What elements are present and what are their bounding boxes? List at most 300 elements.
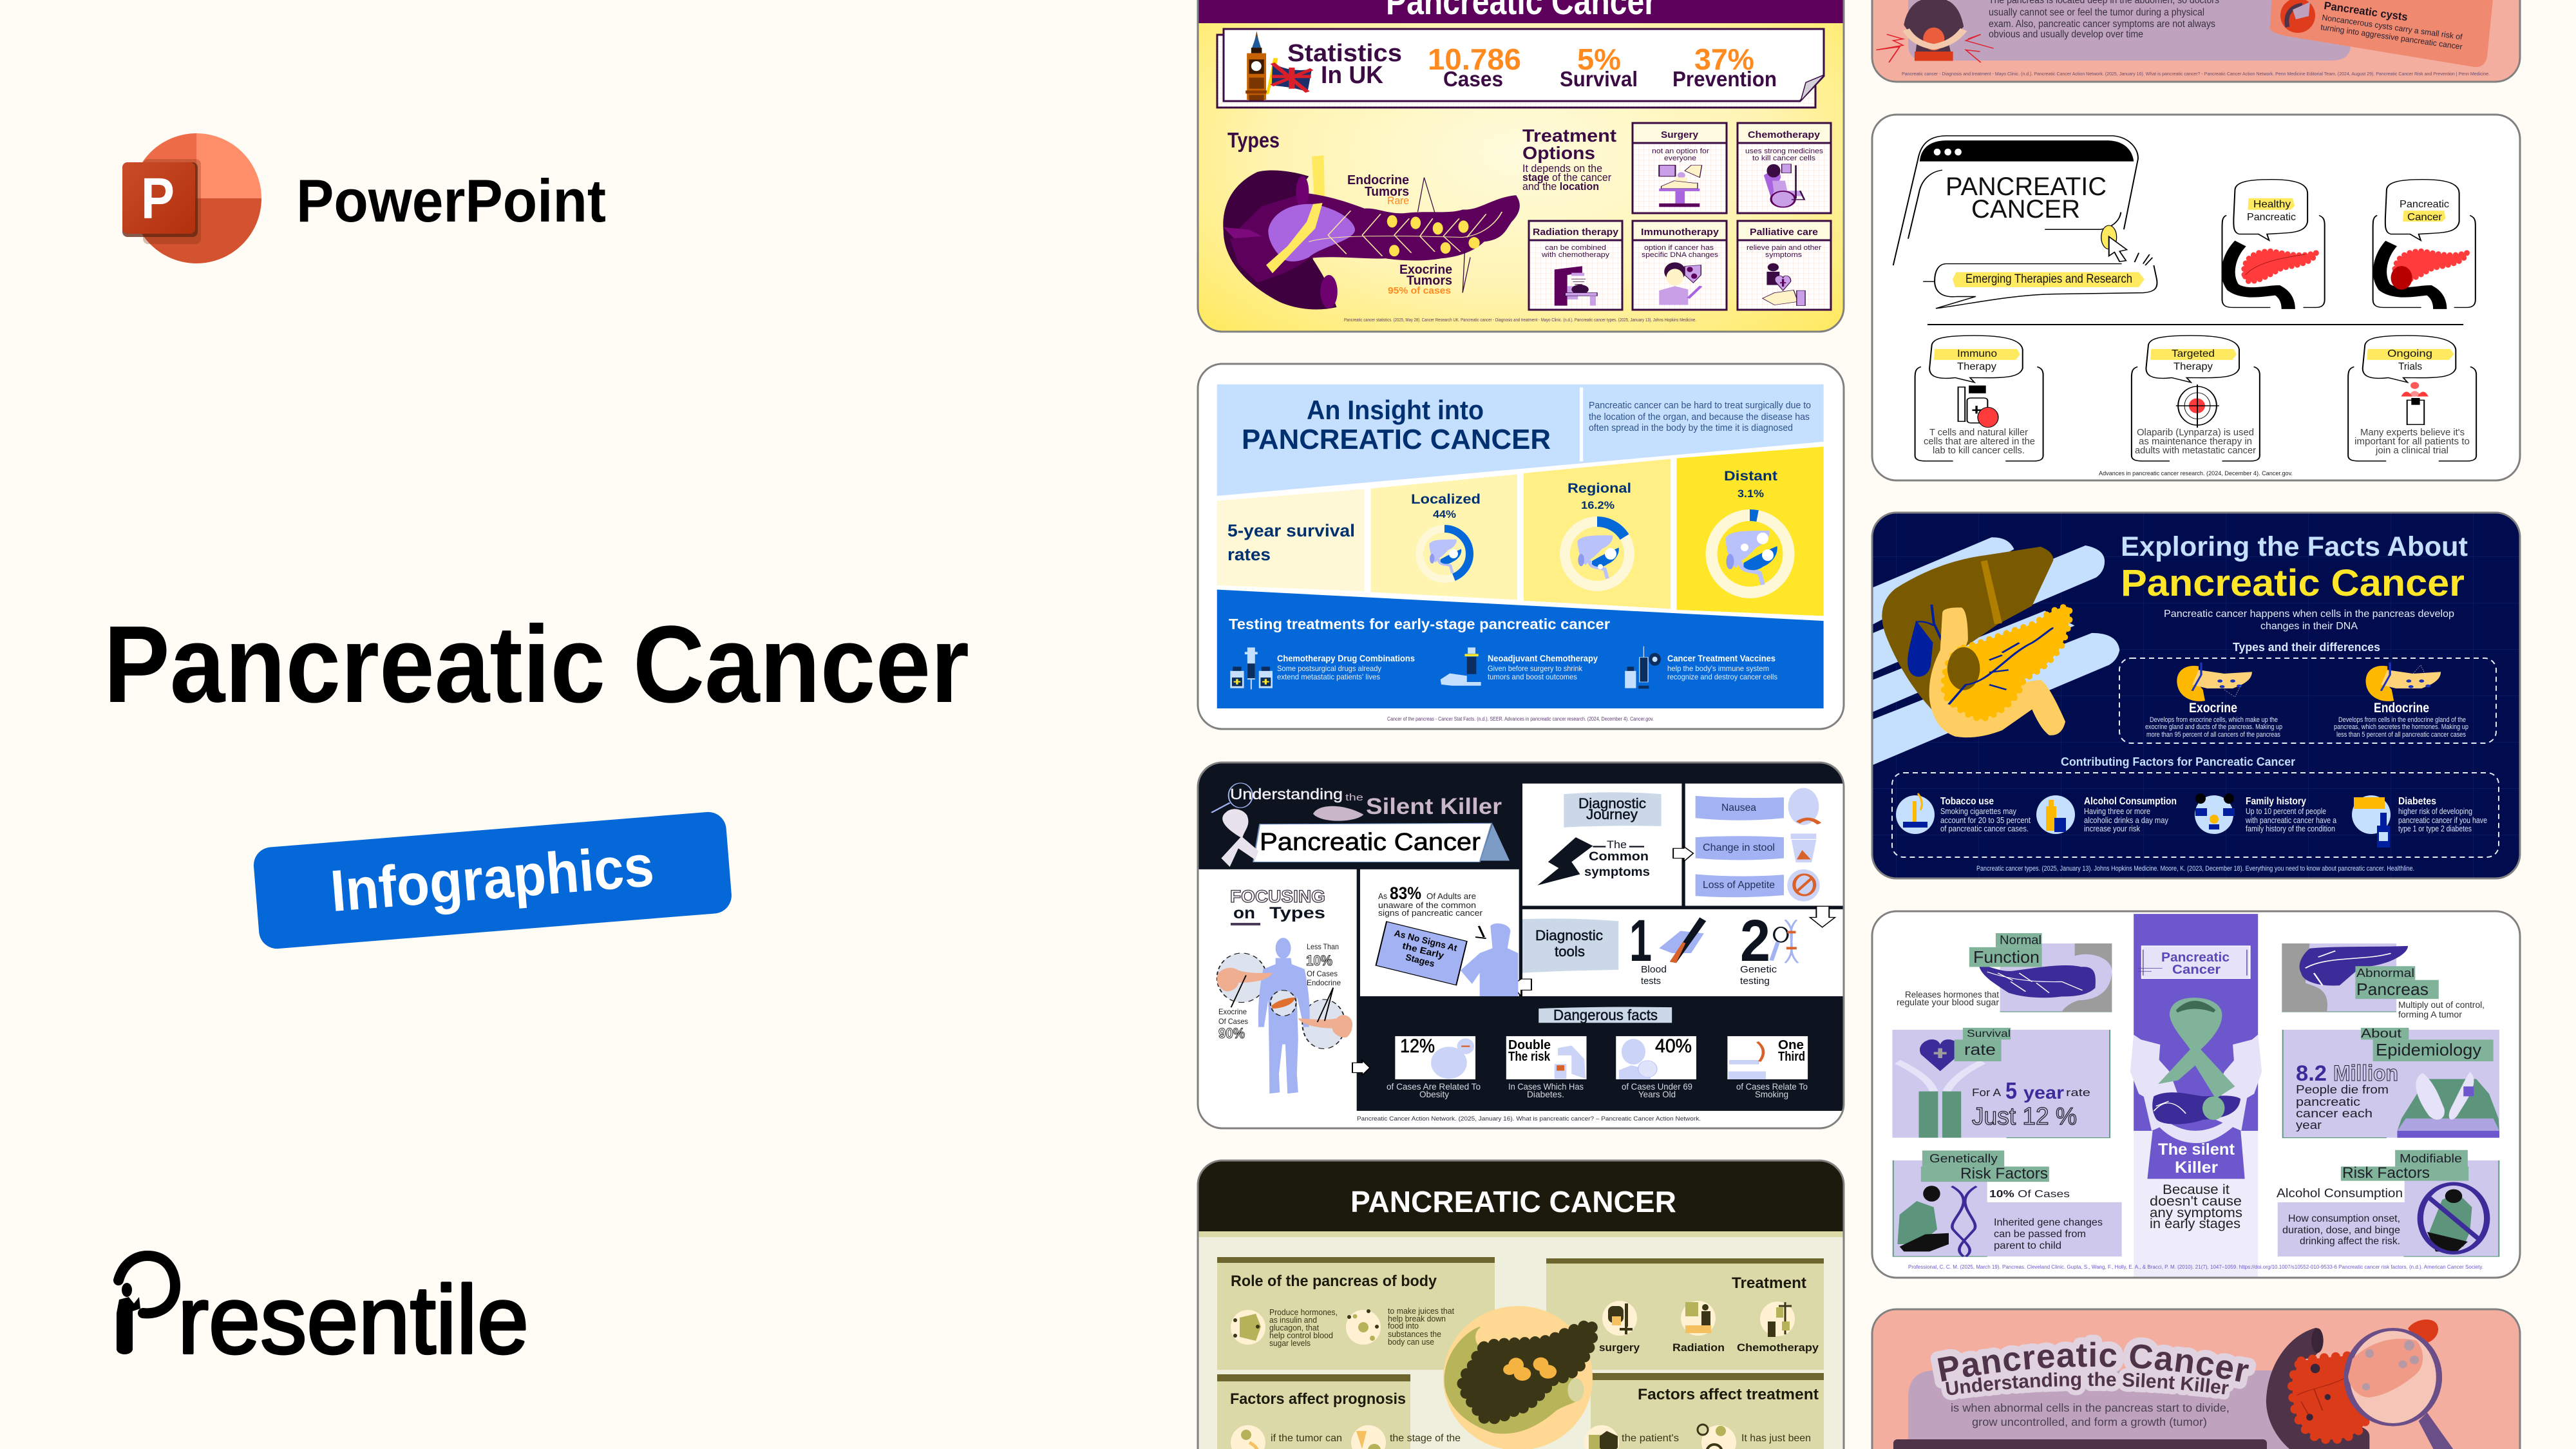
treatment: Chemotherapy Drug Combinations (1230, 647, 1415, 689)
tool: genetic testing: 2 (1740, 908, 1770, 974)
box: Treatment: Chemotherapy (1737, 1341, 1819, 1354)
card: Surgery (1633, 123, 1727, 213)
block: Genetically risk factors: Inherited gene changes (1994, 1217, 2103, 1228)
symptom: Nausea: Nausea (1721, 802, 1756, 813)
label: Normal function: regulate your blood sugar (1897, 998, 2000, 1007)
badge: Infographics (252, 811, 733, 950)
arrow: down (1810, 906, 1835, 927)
description: join a clinical trial (2375, 446, 2448, 456)
callout: Pancreatic cysts: Pancreatic cysts (2323, 0, 2409, 23)
survival icon (1920, 1039, 1960, 1071)
description: T cells and natural killer (1929, 428, 2028, 438)
badge: Infographics: Infographics (328, 833, 656, 924)
label: Endocrine 10%: Endocrine (1307, 978, 1341, 987)
panel background (1872, 513, 2520, 878)
text: stage (1390, 1433, 1461, 1449)
card: Chemotherapy (1738, 123, 1831, 213)
label: Endocrine tumors: Tumors (1365, 185, 1409, 199)
card: Radiation therapy: Radiation therapy (1533, 227, 1619, 238)
block: Epidemiology: People die from (2296, 1083, 2389, 1096)
arrow: right to facts (1352, 1060, 1370, 1075)
treatment: Cancer Treatment Vaccines (1625, 646, 1777, 688)
heading: 5-year survival rates: rates (1227, 545, 1271, 564)
panel: The silent killer (purple) (1872, 911, 2520, 1279)
icon: Big Ben and UK flag (1245, 31, 1312, 100)
header band (1198, 0, 1844, 23)
title: PANCREATIC (1946, 173, 2107, 201)
box: Factors affect treatment (1584, 1373, 1824, 1449)
column text: The silent killer: The silent (2158, 1141, 2235, 1159)
panel: Understanding the Silent Killer (1198, 762, 1848, 1128)
stage: Regional 16.2%: 16.2% (1581, 499, 1615, 511)
heading: Treatment options (1522, 126, 1616, 193)
card: Healthy pancreas (2222, 180, 2325, 309)
column text: The silent killer: Because it (2163, 1182, 2230, 1197)
text: hormones: help control blood (1269, 1331, 1333, 1340)
factor: Tobacco use: of pancreatic cancer cases. (1940, 824, 2029, 833)
label: Endocrine 10%: Of Cases (1307, 969, 1338, 978)
fact: smoking: One (1778, 1038, 1804, 1052)
icon: clock (1698, 1425, 1736, 1449)
section: Diagnostic tools: Diagnostic (1535, 927, 1603, 943)
symptom: Nausea (1721, 788, 1819, 825)
fact: smoking: Smoking (1755, 1089, 1788, 1099)
type: Exocrine (2145, 663, 2282, 739)
sign text: As No Signs At (1393, 927, 1459, 953)
factor: Diabetes (2352, 795, 2487, 848)
callout: 83% unaware (1376, 884, 1518, 996)
intro: Pancreatic cancer happens when cells in the pancreas develop (2164, 609, 2454, 620)
stat: prevention (1674, 49, 1776, 86)
factor: Tobacco use: Tobacco use (1940, 796, 1994, 807)
card: Immunotherapy (1633, 221, 1727, 310)
illustration: body with pancreas (1217, 938, 1352, 1094)
icon: surgeon (1231, 1425, 1265, 1449)
stage: Regional 16.2%: Regional (1567, 481, 1631, 496)
description: Olaparib (Lynparza) is used (2137, 428, 2254, 438)
section: Diagnostic tools (1535, 908, 1798, 987)
dashed frame: types (2119, 658, 2496, 743)
source citation: Pancreatic Cancer Action Network. (2025, January 16). What is pancreatic cancer? – Pancreatic Cancer Action Network. (1357, 1115, 1701, 1122)
sign text: the Early (1401, 940, 1445, 961)
source citation: Cancer of the pancreas - Cancer Stat Facts. (n.d.). SEER. Advances in pancreatic cancer research. (2024, December 4). Cancer.gov. (1387, 716, 1654, 722)
illustration: organs and stripes (1873, 537, 2119, 765)
panel: Pancreatic cancer olive (1198, 1160, 1844, 1449)
description: Develops from exocrine cells, which make up the (2150, 716, 2278, 724)
panel background (1198, 762, 1844, 1128)
fact: under 69: of Cases Under 69 (1622, 1081, 1692, 1092)
fact: obesity: of Cases Are Related To (1387, 1081, 1481, 1092)
block: Survival rate: rate (1964, 1041, 1996, 1059)
box: Factors affect prognosis: Factors affect prognosis (1230, 1390, 1406, 1408)
Presentile wordmark: resentile (178, 1265, 529, 1374)
label: Endocrine tumors: Rare (1387, 194, 1409, 207)
label: Exocrine tumors: Exocrine (1399, 263, 1452, 277)
icon: hormones (1231, 1310, 1265, 1345)
label: Endocrine tumors (1348, 175, 1409, 204)
panel border (1872, 115, 2520, 480)
column title: Pancreatic Cancer: Pancreatic (2161, 951, 2230, 965)
block: Epidemiology: Epidemiology (2376, 1040, 2481, 1059)
heading: The common symptoms: Common (1589, 850, 1649, 864)
factor: Alcohol Consumption: alcoholic drinks a day may (2084, 816, 2169, 825)
alcohol prohibition icon (2429, 1193, 2472, 1247)
source citation: Pancreatic cancer - Diagnosis and treatment - Mayo Clinic. (n.d.). Pancreatic Cancer Action Network. (2025, January 16). What is pancreatic cancer? - Pancreatic Cancer Action Network. Penn Medicine Editorial Team. (2024, August 29). Pancreatic Cancer Risk and Prevention | Penn Medicine. (1902, 71, 2490, 77)
column title: Pancreatic Cancer: Cancer (2172, 963, 2221, 977)
treatment: Neoadjuvant Chemotherapy (1441, 647, 1598, 686)
stage: Distant 3.1%: Distant (1724, 469, 1777, 484)
definition text (1951, 1401, 2230, 1428)
paragraph: usually cannot see or feel the tumor during a physical (1989, 7, 2204, 18)
label: Normal function (1897, 934, 2041, 1007)
card: Chemotherapy: Chemotherapy (1748, 129, 1821, 140)
panel background (1872, 1309, 2520, 1449)
title: Understanding the Silent Killer: Silent Killer (1366, 794, 1502, 819)
icon: vaccine (1625, 646, 1661, 688)
arrow: left to awareness (1511, 979, 1531, 996)
factor: Diabetes: higher risk of developing (2398, 807, 2472, 816)
block: Survival rate (1964, 1028, 2090, 1130)
icon: stage (1351, 1425, 1386, 1449)
panel title: PANCREATIC CANCER (1350, 1185, 1676, 1218)
icon: stool cup (1791, 833, 1816, 862)
block: Modifiable risk factors: duration, dose, and binge (2282, 1225, 2400, 1236)
label: Exocrine tumors: 95% of cases (1388, 285, 1451, 296)
symptom: Change in stool (1703, 833, 1816, 862)
block: Genetically risk factors: can be passed from (1994, 1229, 2086, 1240)
callout: 83% unaware: As (1378, 891, 1387, 901)
label: Normal function: Releases hormones that (1905, 990, 1999, 999)
block: Epidemiology (2296, 1027, 2481, 1132)
card: Radiation therapy: can be combined (1545, 244, 1606, 252)
box: Treatment: surgery (1599, 1341, 1640, 1354)
panel background (1872, 0, 2520, 82)
column text: The silent killer: any symptoms (2150, 1206, 2242, 1220)
label: Normal function: Function (1973, 947, 2040, 967)
text: hormones: Produce hormones, (1269, 1307, 1338, 1317)
treatment: Neoadjuvant Chemotherapy: Given before surgery to shrink (1488, 664, 1583, 673)
block: Survival rate: 5 (2005, 1077, 2017, 1104)
column text: The silent killer: in early stages (2150, 1217, 2240, 1231)
text: juices: body can use (1388, 1337, 1434, 1347)
column text: The silent killer: Killer (2175, 1159, 2218, 1177)
heading: 5-year survival rates: 5-year survival (1227, 521, 1355, 540)
box: Factors affect treatment: Factors affect treatment (1638, 1386, 1819, 1403)
stat: prevention: Prevention (1672, 67, 1777, 91)
factor: Tobacco use: account for 20 to 35 percent (1940, 816, 2031, 825)
card: Pancreatic cancer: Cancer (2407, 212, 2443, 223)
banner: Pancreatic Cancer with ribbon (1221, 809, 1510, 867)
description: as maintenance therapy in (2139, 437, 2252, 447)
title (2121, 531, 2468, 604)
label: Exocrine 90%: 90% (1218, 1025, 1245, 1041)
icon: syringe and hand (1441, 647, 1481, 686)
icon: sick face (1788, 788, 1819, 825)
label: Endocrine 10%: Less Than (1307, 942, 1339, 951)
icon: PowerPoint circle (122, 133, 261, 263)
icon: Presentile P with person (117, 1256, 175, 1354)
label: Exocrine 90%: Of Cases (1218, 1017, 1248, 1026)
pancreas right (2282, 943, 2327, 1012)
stage: Distant 3.1%: 3.1% (1738, 488, 1764, 500)
card: Immuno therapy (1915, 336, 2043, 461)
text: hormones (1269, 1307, 1338, 1348)
title: Understanding the Silent Killer: Understanding (1230, 786, 1343, 802)
section: Diagnostic tools: tools (1555, 943, 1585, 960)
card: Ongoing trials: Trials (2398, 361, 2422, 372)
type: Exocrine: Exocrine (2189, 701, 2237, 715)
factor: Family history: Family history (2246, 796, 2306, 807)
fact: smoking: of Cases Relate To (1736, 1081, 1808, 1092)
heading: types: Types and their differences (2233, 641, 2380, 654)
text: stage: the stage of the (1390, 1433, 1461, 1444)
source citation: Pancreatic cancer types. (2025, January 13). Johns Hopkins Medicine. Moore, K. (2023, December 18). Everything you need to know about pancreatic cancer. Healthline. (1976, 865, 2414, 873)
treatment: Chemotherapy Drug Combinations: Chemotherapy Drug Combinations (1277, 653, 1415, 663)
block: Epidemiology: About (2361, 1027, 2402, 1041)
title: PANCREATIC CANCER (1242, 424, 1551, 455)
block: Genetically risk factors: parent to child (1994, 1240, 2061, 1251)
box: Treatment: Treatment (1732, 1274, 1806, 1292)
description: adults with metastatic cancer (2135, 446, 2256, 456)
fact: obesity: 12% (1400, 1036, 1435, 1057)
symptom: Loss of Appetite: Loss of Appetite (1703, 880, 1775, 891)
label: Endocrine tumors: Endocrine (1347, 173, 1409, 187)
text: juices: to make juices that (1388, 1306, 1454, 1316)
heading: Treatment options: stage of the cancer (1522, 171, 1611, 184)
description: Develops from cells in the endocrine gland of the (2338, 716, 2466, 724)
panel border (1872, 1309, 2520, 1449)
paragraph: obvious and usually develop over time (1989, 29, 2143, 40)
treatment: Cancer Treatment Vaccines: recognize and destroy cancer cells (1667, 672, 1777, 681)
block: Modifiable risk factors: Modifiable (2400, 1151, 2462, 1165)
heading: contributing factors: Contributing Factors for Pancreatic Cancer (2061, 755, 2295, 768)
main title: Pancreatic Cancer (104, 603, 969, 726)
paragraph (1989, 0, 2219, 40)
title: An Insight into (1307, 395, 1484, 425)
label: Endocrine 10% (1306, 942, 1341, 987)
donut chart: 16.2% (1565, 522, 1629, 586)
panel background (1198, 1160, 1844, 1449)
card: Radiation therapy (1529, 221, 1622, 310)
block: Survival rate: year (2023, 1083, 2064, 1103)
icon: patient and shield (1659, 262, 1701, 305)
stat: cases (1430, 49, 1520, 86)
block: Epidemiology: cancer each (2296, 1107, 2372, 1120)
fact: under 69: 40% (1655, 1036, 1692, 1057)
column text: The silent killer (2150, 1141, 2242, 1231)
stat: prevention: 37% (1694, 43, 1754, 76)
icon: test tube in hand (1659, 917, 1706, 963)
header strip (1198, 1231, 1844, 1237)
factor: Alcohol Consumption (2036, 795, 2177, 834)
block: Modifiable risk factors: How consumption onset, (2288, 1213, 2400, 1224)
label: Exocrine tumors (1388, 264, 1452, 294)
description: less than 5 percent of all pancreatic cancer cases (2336, 731, 2466, 739)
shapes (1892, 914, 2499, 1279)
block: Epidemiology: year (2296, 1119, 2322, 1132)
stat: cases: Cases (1443, 67, 1503, 91)
column title: Pancreatic Cancer (2161, 951, 2230, 977)
description (1924, 428, 2035, 456)
label: Abnormal pancreas: Multiply out of control, (2398, 1000, 2485, 1010)
box: Diagnostic journey: Journey (1586, 806, 1638, 822)
block: Epidemiology: 8.2 (2296, 1061, 2327, 1086)
section: Focusing on types (1217, 887, 1352, 1094)
card: Surgery: everyone (1664, 155, 1696, 162)
intro paragraph (1589, 401, 1811, 433)
tool: blood tests (1629, 908, 1706, 987)
panel: Exploring the facts (navy) (1872, 513, 2520, 878)
block: Modifiable risk factors: Risk Factors (2342, 1164, 2430, 1182)
card: Ongoing trials (2348, 336, 2476, 461)
card: Palliative care: relieve pain and other (1747, 244, 1821, 252)
symptom: Loss of Appetite (1703, 869, 1820, 902)
panel background (1872, 115, 2520, 480)
type: Endocrine (2334, 663, 2468, 739)
card: Targeted therapy: Targeted (2172, 348, 2215, 359)
green strokes (1893, 1012, 2499, 1256)
tool: genetic testing: testing (1740, 976, 1770, 987)
heading: Treatment options: It depends on the (1522, 162, 1602, 175)
text: juices: substances the (1388, 1329, 1441, 1339)
text: tumor removal: if the tumor can (1271, 1433, 1342, 1444)
description: exocrine gland and ducts of the pancreas. Making up (2145, 723, 2282, 731)
card: Immuno therapy: Therapy (1957, 361, 1996, 372)
factor: Diabetes: type 1 or type 2 diabetes (2398, 824, 2472, 833)
factor: Family history: family history of the condition (2246, 824, 2335, 833)
card: Palliative care: Palliative care (1750, 227, 1818, 238)
label: Exocrine 90% (1218, 1007, 1248, 1041)
card: Chemotherapy: to kill cancer cells (1752, 155, 1816, 162)
description: cells that are altered in the (1924, 437, 2035, 447)
heading: Types: Types (1227, 128, 1280, 152)
heading: Treatment options: and the location (1522, 180, 1599, 193)
factor: Alcohol Consumption: Alcohol Consumption (2084, 796, 2177, 807)
box: Role of the pancreas (1217, 1257, 1495, 1370)
text: hormones: glucagon, that (1269, 1323, 1319, 1332)
curved title: Understanding the Silent Killer (1946, 1372, 2229, 1395)
banner: Pancreatic Cancer with ribbon: Pancreatic Cancer (1260, 829, 1481, 856)
label: Abnormal pancreas: forming A tumor (2398, 1010, 2463, 1019)
fact: smoking (1728, 1038, 1808, 1099)
text: patient's: the patient's (1622, 1433, 1679, 1444)
section: Focusing on types: FOCUSING (1230, 887, 1325, 906)
definition text: is when abnormal cells in the pancreas start to divide, (1951, 1401, 2230, 1414)
intro (2164, 609, 2454, 632)
treatment: Chemotherapy Drug Combinations: extend metastatic patients' lives (1277, 672, 1380, 681)
callout: Pancreatic cysts: turning into aggressive pancreatic cancer (2320, 23, 2463, 52)
section: Focusing on types: Types (1269, 904, 1325, 922)
intro paragraph: often spread in the body by the time it is diagnosed (1589, 423, 1793, 433)
title (1242, 395, 1551, 455)
illustration: pancreas (1223, 155, 1520, 310)
icon: chemotherapy chair (1764, 164, 1804, 207)
factor: Tobacco use (1896, 793, 2031, 834)
icon: chemotherapy (1760, 1302, 1795, 1337)
dark bar (1893, 1439, 2267, 1449)
factor: Diabetes: pancreatic cancer if you have (2398, 816, 2487, 825)
treatment: Cancer Treatment Vaccines: help the body's immune system (1667, 664, 1769, 673)
factor: Alcohol Consumption: increase your risk (2084, 824, 2141, 833)
title (1946, 173, 2107, 223)
icon: person with abdominal pain (1876, 0, 1994, 62)
heading: Statistics in UK: Statistics (1287, 40, 1402, 67)
panel: Emerging therapies (1872, 115, 2520, 480)
intro paragraph: Pancreatic cancer can be hard to treat surgically due to (1589, 401, 1811, 411)
panel: Statistics and types (yellow) (1198, 0, 1844, 332)
panel: An Insight into Pancreatic Cancer (1198, 364, 1844, 729)
title: Understanding the Silent Killer: the (1345, 792, 1363, 803)
title: Exploring the Facts About (2121, 531, 2468, 562)
block: Modifiable risk factors: drinking affect the risk. (2300, 1236, 2400, 1247)
statistics banner (1217, 29, 1824, 108)
label: Normal function: Normal (2000, 934, 2041, 947)
panel border (1872, 911, 2520, 1278)
heading line: In UK (1321, 62, 1384, 89)
dashed frame: factors (1892, 773, 2499, 857)
description: pancreas, which secretes the hormones. Making up (2334, 723, 2468, 731)
box: Treatment (1546, 1258, 1824, 1370)
box: Role of the pancreas: Role of the pancreas of body (1231, 1273, 1437, 1290)
panel background (1198, 364, 1844, 729)
tool: genetic testing: Genetic (1740, 964, 1777, 975)
panel border (1198, 762, 1844, 1128)
source citation: Advances in pancreatic cancer research. (2024, December 4). Cancer.gov. (2099, 470, 2293, 477)
card: Palliative care: symptoms (1765, 251, 1803, 259)
callout: Pancreatic cysts (2269, 0, 2496, 67)
banner sheets (1217, 29, 1824, 108)
treatment: Neoadjuvant Chemotherapy: Neoadjuvant Chemotherapy (1488, 653, 1598, 663)
label: Exocrine 90%: Exocrine (1218, 1007, 1247, 1016)
tool: genetic testing (1740, 908, 1798, 987)
treatment: Neoadjuvant Chemotherapy: tumors and boost outcomes (1488, 672, 1577, 681)
panel border (1198, 0, 1844, 332)
logo: PowerPoint (122, 133, 606, 263)
treatment: Chemotherapy Drug Combinations: Some postsurgical drugs already (1277, 664, 1381, 673)
card: Immunotherapy: option if cancer has (1644, 244, 1714, 252)
column text: The silent killer: doesn't cause (2150, 1194, 2242, 1209)
white cells and shapes (1198, 784, 1848, 1128)
factor: Alcohol Consumption: Having three or more (2084, 807, 2150, 816)
icon: syringe and bottles (1230, 647, 1273, 689)
icon: surgery (1602, 1301, 1637, 1336)
label: Abnormal pancreas: Abnormal (2356, 967, 2414, 980)
tool: blood tests: 1 (1629, 908, 1652, 974)
text: juices (1388, 1306, 1454, 1347)
text: just been: It has just been (1741, 1433, 1811, 1444)
title: Understanding the Silent Killer (1211, 783, 1502, 821)
card: Targeted therapy (2132, 336, 2260, 461)
stage: Regional 16.2% (1565, 481, 1631, 586)
arrows between cells (1352, 847, 1835, 1075)
stage: Localized 44%: Localized (1411, 492, 1481, 507)
description (2354, 428, 2470, 456)
factor: Family history: with pancreatic cancer have a (2245, 816, 2336, 825)
fact: diabetes: Diabetes. (1527, 1089, 1564, 1099)
box: Diagnostic journey (1578, 795, 1646, 822)
stage: Localized 44%: 44% (1433, 508, 1456, 520)
curved title: Understanding the Silent Killer (1941, 1368, 2233, 1400)
epidemiology icon (2397, 1079, 2499, 1131)
icon: radiation machine (1555, 266, 1597, 306)
sign text: Stages (1405, 952, 1436, 969)
description (2145, 716, 2282, 739)
genetic icon (1923, 1186, 1940, 1202)
panel: Understanding the silent killer (salmon) (1873, 1310, 2519, 1449)
panel background (1198, 0, 1844, 332)
icon: plate crossed out (1787, 869, 1820, 902)
text: juices: help break down (1388, 1314, 1446, 1323)
